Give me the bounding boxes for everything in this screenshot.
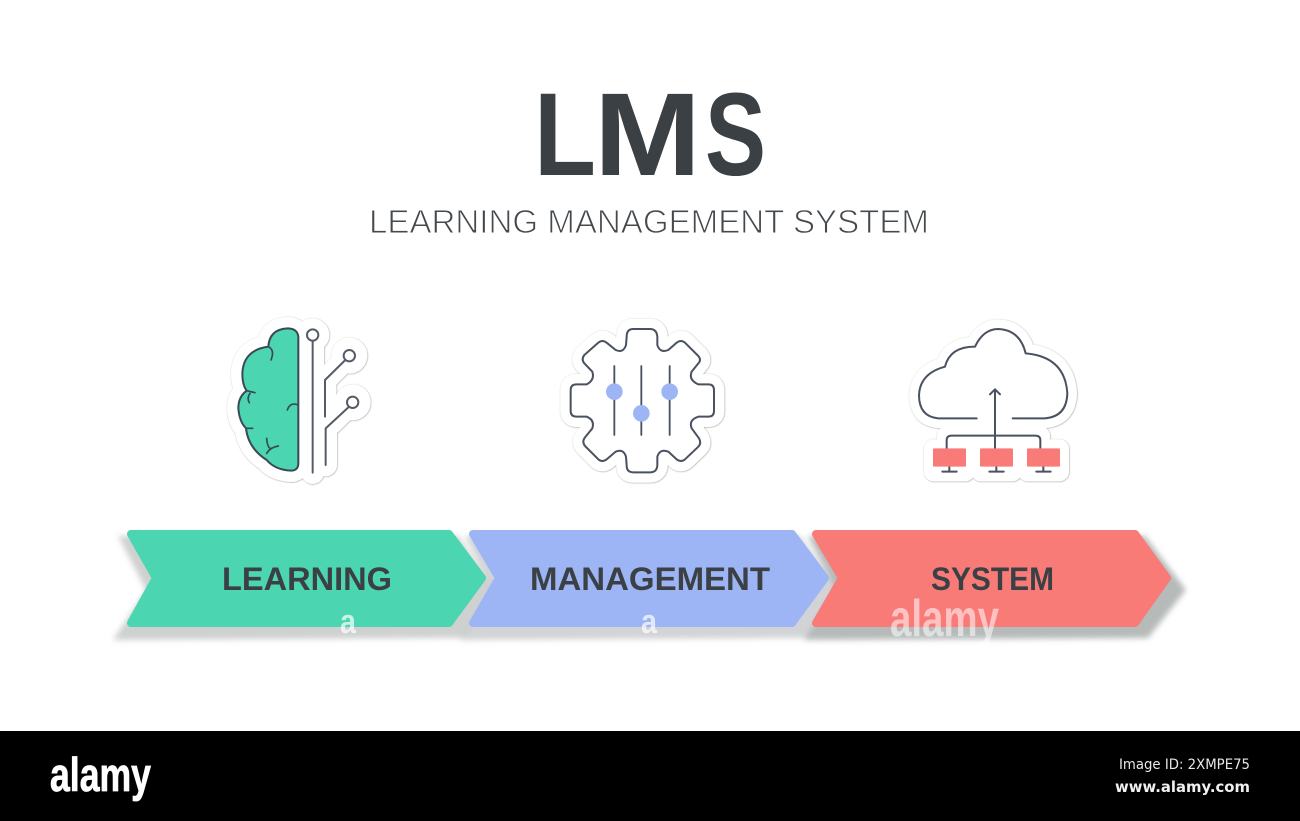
website: www.alamy.com [1115,778,1250,796]
title: L [534,69,596,201]
footer bar [0,731,1300,821]
icon: brain with circuit [238,328,359,473]
image id: Image ID: 2XMPE75 [1119,757,1250,773]
arrow: management [473,534,825,623]
icon: gear with sliders [571,329,714,472]
watermarks [340,590,999,648]
subtitle: LEARNING MANAGEMENT SYSTEM [369,203,929,240]
label: learning: LEARNING [222,561,392,597]
arrow: learning [131,534,482,623]
label: system: SYSTEM [931,561,1054,597]
footer logo: alamy [50,748,151,801]
watermarks: alamy [890,590,999,648]
watermarks: a [340,603,357,641]
label: management: MANAGEMENT [530,561,770,597]
title: M [594,69,701,201]
arrow shadows [113,536,1186,640]
watermarks: a [641,603,658,641]
arrow: system [816,534,1167,623]
title [534,69,766,201]
title: S [705,69,766,201]
icon: cloud network [919,329,1067,472]
